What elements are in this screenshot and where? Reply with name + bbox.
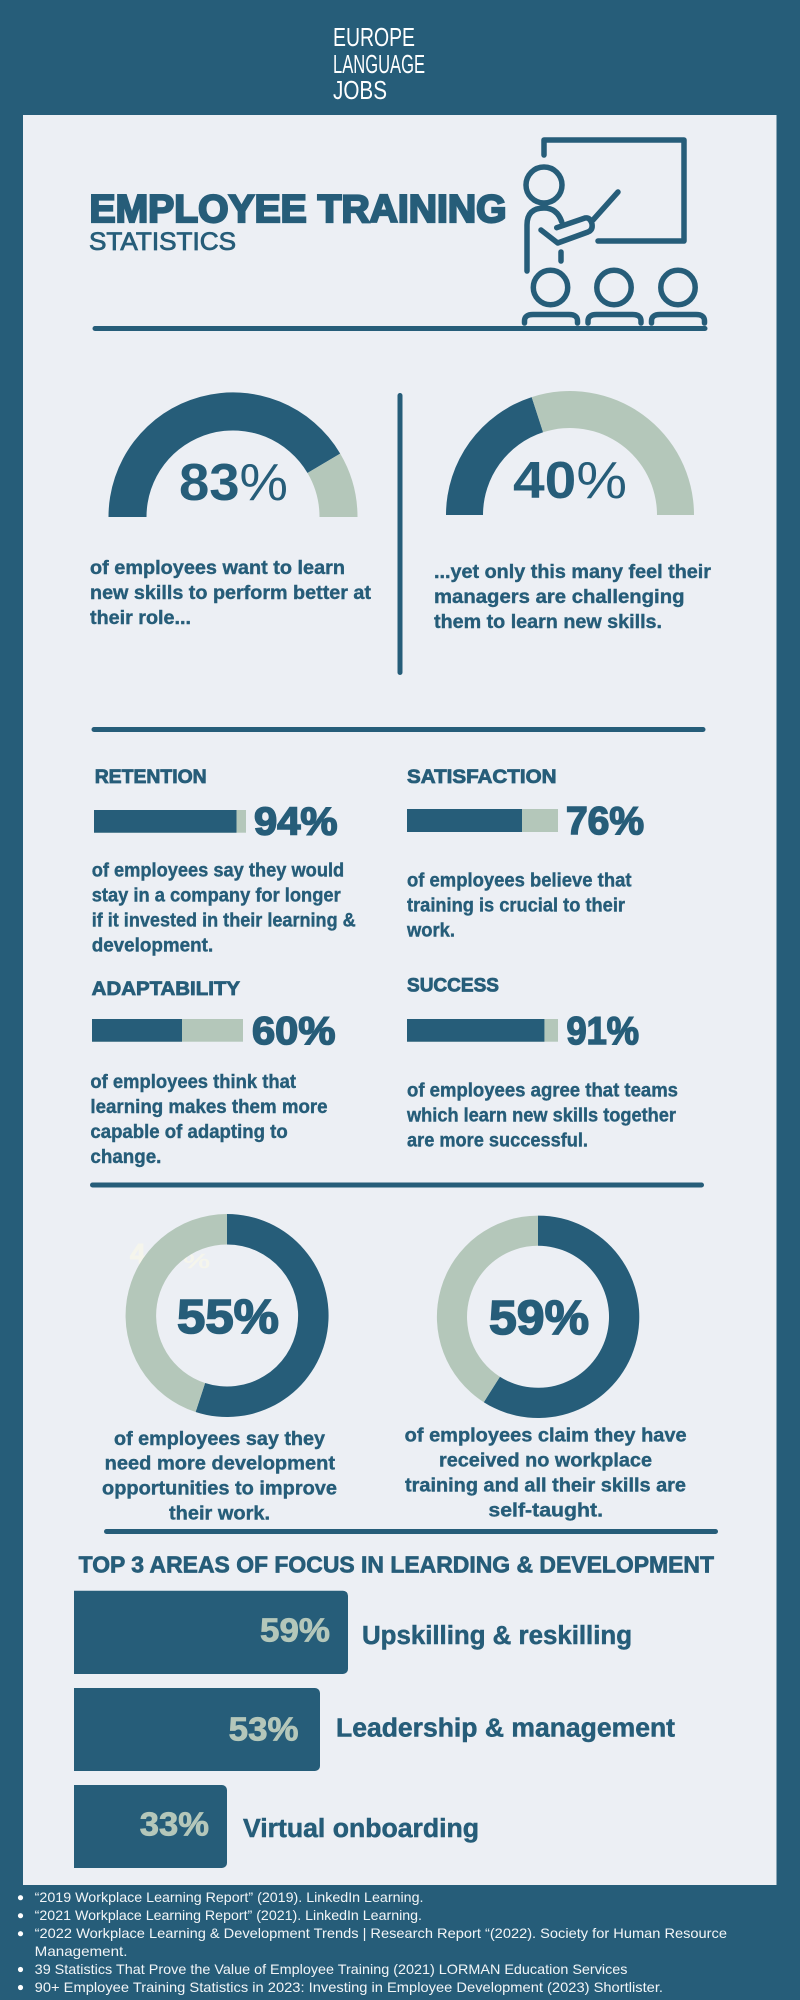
- gauge: 40 percent: [446, 391, 694, 515]
- stat: success: which learn new skills together: [406, 1105, 676, 1127]
- sources list: [18, 1890, 727, 1995]
- stat: retention: RETENTION: [95, 766, 207, 788]
- text: 55 percent caption: of employees say they: [114, 1428, 325, 1450]
- logo: Europe Language Jobs: LANGUAGE: [333, 49, 425, 79]
- bar: upskilling and reskilling: Upskilling & reskilling: [362, 1622, 632, 1650]
- logo: Europe Language Jobs: JOBS: [333, 75, 387, 105]
- text: 40 percent caption: them to learn new skills.: [434, 611, 662, 633]
- stat: retention: 94%: [254, 800, 338, 844]
- text: 55 percent caption: [102, 1428, 337, 1524]
- subtitle: STATISTICS: [89, 228, 236, 256]
- stat: retention: development.: [92, 935, 213, 957]
- text: 83 percent caption: of employees want to learn: [90, 557, 345, 579]
- logo: Europe Language Jobs: [333, 22, 425, 105]
- stat: adaptability: of employees think that: [90, 1071, 296, 1093]
- stat: retention: of employees say they would: [92, 860, 344, 882]
- sources list: Management.: [35, 1944, 128, 1959]
- text: 83 percent caption: their role...: [90, 607, 191, 629]
- text: 59 percent caption: training and all their skills are: [405, 1475, 686, 1497]
- gauge: 40 percent: 40%: [513, 452, 627, 510]
- stat: satisfaction: [406, 766, 644, 942]
- donut chart: 55 percent: %: [183, 1251, 210, 1273]
- bar: leadership and management: Leadership & management: [336, 1715, 676, 1743]
- donut chart: 55 percent: [126, 1214, 329, 1417]
- bar: leadership and management: [74, 1688, 676, 1771]
- stat: adaptability: change.: [90, 1146, 161, 1168]
- stat: success: of employees agree that teams: [407, 1080, 678, 1102]
- donut chart: 55 percent: 4: [130, 1238, 146, 1269]
- text: 55 percent caption: their work.: [169, 1502, 270, 1524]
- text: 59 percent caption: received no workplace: [439, 1450, 652, 1472]
- stat: retention: if it invested in their learning &: [92, 910, 356, 932]
- stat: success: [406, 974, 678, 1152]
- stat: adaptability: ADAPTABILITY: [92, 978, 240, 1000]
- stat: satisfaction: work.: [406, 920, 455, 942]
- sources list: “2019 Workplace Learning Report” (2019). LinkedIn Learning.: [35, 1890, 423, 1905]
- stat: adaptability: 60%: [252, 1010, 335, 1053]
- gauge: 83 percent: 83%: [179, 454, 288, 512]
- gauge: 83 percent: [108, 392, 358, 517]
- stat: satisfaction: training is crucial to their: [407, 895, 625, 917]
- text: 59 percent caption: self-taught.: [488, 1500, 603, 1522]
- stat: adaptability: [90, 978, 335, 1168]
- text: 83 percent caption: new skills to perform better at: [90, 582, 372, 604]
- text: 59 percent caption: [405, 1425, 687, 1522]
- sources list: “2022 Workplace Learning & Development Trends | Research Report “(2022). Society for Human Resource: [35, 1926, 727, 1941]
- donut chart: 59 percent: [437, 1216, 639, 1418]
- text: 40 percent caption: ...yet only this many feel their: [434, 561, 711, 583]
- stat: success: 91%: [566, 1010, 639, 1053]
- heading: top 3 areas: TOP 3 AREAS OF FOCUS IN LEARDING & DEVELOPMENT: [79, 1552, 715, 1578]
- text: 59 percent caption: of employees claim they have: [405, 1425, 687, 1447]
- stat: success: SUCCESS: [407, 974, 499, 996]
- bar: virtual onboarding: 33%: [140, 1806, 209, 1843]
- text: 40 percent caption: managers are challenging: [434, 586, 684, 608]
- donut chart: 59 percent: 59%: [489, 1292, 589, 1345]
- bar: virtual onboarding: [74, 1785, 479, 1868]
- bar: virtual onboarding: Virtual onboarding: [243, 1815, 479, 1843]
- stat: adaptability: capable of adapting to: [90, 1121, 288, 1143]
- stat: retention: [92, 766, 356, 957]
- text: 55 percent caption: opportunities to improve: [102, 1478, 337, 1500]
- text: 55 percent caption: need more development: [105, 1453, 336, 1475]
- donut chart: 55 percent: 55%: [177, 1291, 279, 1344]
- title: EMPLOYEE TRAINING: [90, 188, 507, 231]
- text: 83 percent caption: [90, 557, 372, 629]
- sources list: 90+ Employee Training Statistics in 2023: Investing in Employee Development (2023) Shortlister.: [35, 1980, 663, 1995]
- bar: upskilling and reskilling: [74, 1591, 632, 1674]
- bar: upskilling and reskilling: 59%: [260, 1612, 330, 1648]
- bar: leadership and management: 53%: [229, 1711, 298, 1748]
- stat: success: are more successful.: [407, 1130, 588, 1152]
- stat: satisfaction: of employees believe that: [407, 870, 632, 892]
- stat: adaptability: learning makes them more: [90, 1096, 328, 1118]
- stat: satisfaction: SATISFACTION: [407, 766, 556, 788]
- stat: retention: stay in a company for longer: [92, 885, 341, 907]
- sources list: 39 Statistics That Prove the Value of Employee Training (2021) LORMAN Education Services: [35, 1962, 628, 1977]
- logo: Europe Language Jobs: EUROPE: [333, 22, 415, 52]
- text: 40 percent caption: [434, 561, 711, 633]
- sources list: “2021 Workplace Learning Report” (2021). LinkedIn Learning.: [35, 1908, 422, 1923]
- icon: presenter with whiteboard and students: [524, 140, 704, 323]
- stat: satisfaction: 76%: [566, 800, 644, 843]
